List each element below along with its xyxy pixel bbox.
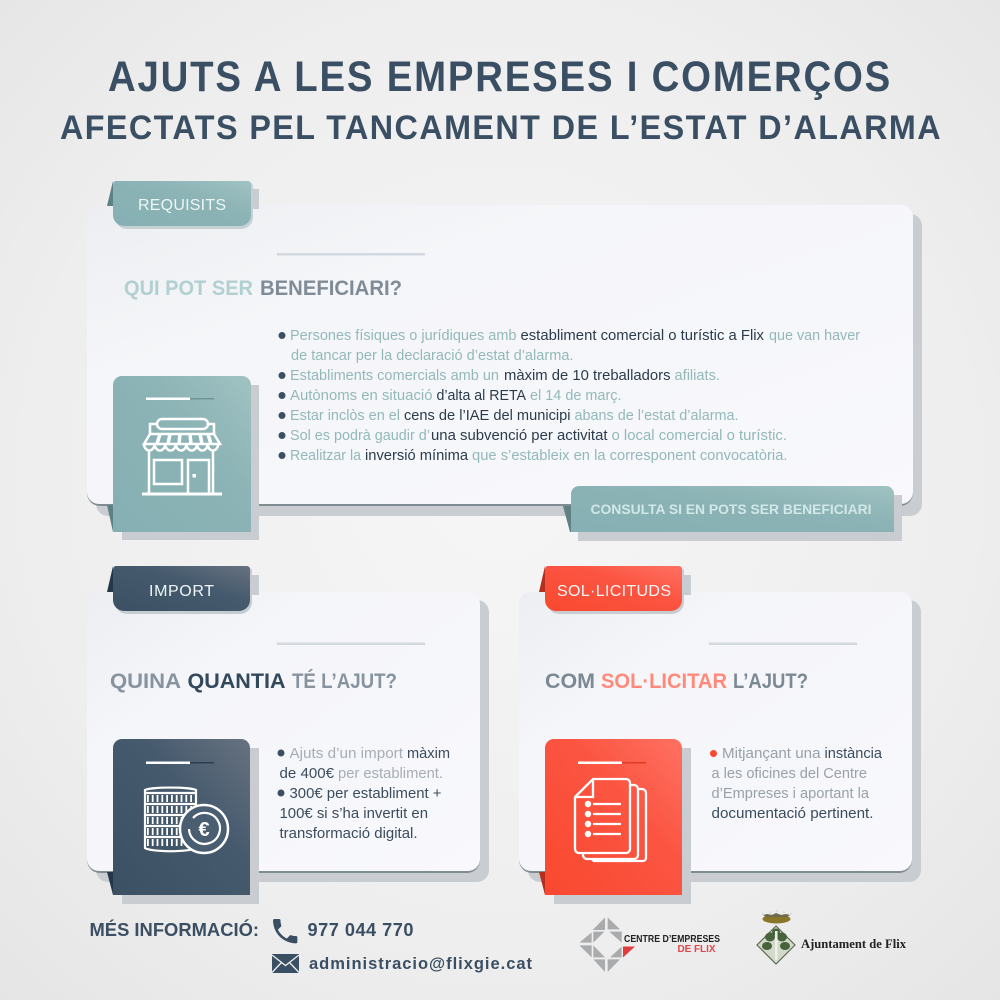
panel: sol·licituds [519,566,921,904]
requirements list: el 14 de març. [530,388,622,404]
requirements list: d’alta al RETA [436,388,526,404]
logo: centre d'empreses de flix [579,917,720,972]
amount list: transformació digital. [280,826,418,842]
tab: sol·licituds [545,566,684,614]
tab: requisits: REQUISITS [138,197,226,214]
heading: com sol·licitar: SOL·LICITAR [601,669,727,693]
application text: d’Empreses i aportant la [712,786,870,802]
heading: com sol·licitar: COM [545,669,595,693]
tab: import [113,566,252,614]
heading: quina quantia: TÉ L’AJUT? [292,668,397,693]
divider line [277,253,425,256]
icon box: coins [113,739,259,904]
requirements list: Realitzar la [290,448,362,464]
application text [710,746,883,822]
divider line [709,642,857,645]
icon: phone [273,919,297,943]
amount list: per establiment. [338,766,443,782]
requirements list: inversió mínima [365,448,469,464]
heading: qui pot ser beneficiari [124,276,402,300]
heading: qui pot ser beneficiari: BENEFICIARI? [260,276,402,300]
title [60,53,942,147]
amount list: 300€ per establiment + [290,786,442,802]
application text: Mitjançant una [722,746,821,762]
requirements list: afiliats. [674,368,720,384]
amount list [278,746,450,842]
logo: ajuntament de flix [757,910,907,964]
heading: quina quantia: QUANTIA [188,669,286,693]
requirements list: Establiments comercials amb un [290,368,499,384]
heading: com sol·licitar [545,669,808,693]
divider line [277,642,425,645]
requirements list: establiment comercial o turístic a Flix [520,328,765,344]
logo: ajuntament de flix: Ajuntament de Flix [801,937,907,951]
requirements list: Sol es podrà gaudir d’ [290,428,430,444]
phone number: 977 044 770 [308,919,414,940]
logo: centre d'empreses de flix: DE FLIX [678,944,716,955]
application text: documentació pertinent. [712,806,874,822]
requirements list: una subvenció per activitat [431,428,608,444]
panel: import [87,566,489,904]
application text: a les oficines del Centre [712,766,867,782]
button: consulta: CONSULTA SI EN POTS SER BENEFICIARI [590,502,872,517]
requirements list: abans de l’estat d’alarma. [574,408,738,424]
application text: instància [824,746,883,762]
requirements list: Autònoms en situació [290,388,432,404]
icon box: documents [545,739,691,904]
panel: requisits [87,181,922,541]
requirements list: Persones físiques o jurídiques amb [290,328,516,344]
amount list: de 400€ [280,766,335,782]
icon box: coins: € [198,819,210,841]
tab: import: IMPORT [149,583,214,600]
amount list: 100€ si s’ha invertit en [280,806,428,822]
heading: com sol·licitar: L’AJUT? [733,669,808,693]
email: administracio@flixgie.cat [309,954,533,973]
requirements list: que van haver [769,328,860,344]
heading: quina quantia [110,668,397,693]
icon: envelope [272,954,299,973]
footer label: més informació: MÉS INFORMACIÓ: [90,919,259,940]
heading: qui pot ser beneficiari: QUI POT SER [124,276,253,300]
title: AJUTS A LES EMPRESES I COMERÇOS [108,53,892,101]
amount list: màxim [407,746,450,762]
amount list: Ajuts d’un import [290,746,403,762]
heading: quina quantia: QUINA [110,669,181,693]
requirements list: cens de l’IAE del municipi [404,408,570,424]
requirements list: Estar inclòs en el [290,408,400,424]
requirements list [278,328,860,464]
tab: sol·licituds: SOL·LICITUDS [557,583,671,600]
requirements list: o local comercial o turístic. [612,428,787,444]
requirements list: que s’estableix en la corresponent convocatòria. [472,448,788,464]
title: AFECTATS PEL TANCAMENT DE L’ESTAT D’ALARMA [60,109,942,147]
requirements list: màxim de 10 treballadors [504,368,670,384]
icon box: shop [113,376,259,540]
tab: requisits [113,181,253,229]
logo: centre d'empreses de flix: CENTRE D’EMPRESES [624,934,720,945]
requirements list: de tancar per la declaració d’estat d’alarma. [291,348,574,364]
button: consulta [563,486,902,541]
